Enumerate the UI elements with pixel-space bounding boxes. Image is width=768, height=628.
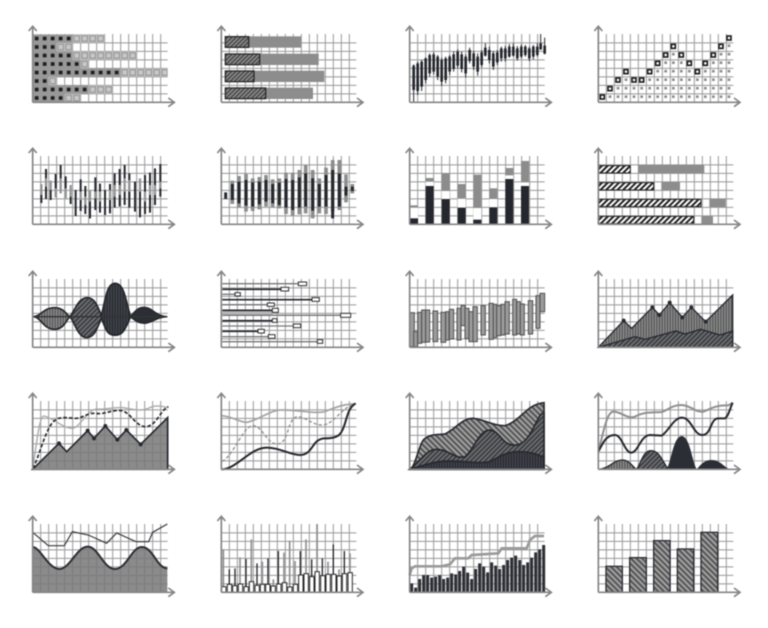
chart: area with dashed line	[29, 393, 174, 474]
chart: symmetric range bars	[217, 148, 363, 229]
chart: stacked wave areas	[406, 393, 551, 474]
chart: boxes with stems	[217, 516, 363, 597]
chart: stepped dot matrix	[594, 26, 740, 107]
chart: candlesticks rising	[406, 26, 551, 107]
chart: progress bars	[217, 26, 363, 107]
chart: heat grid of squares	[29, 26, 174, 107]
chart: wave area with thin line	[29, 516, 174, 597]
chart: two-tone range bars	[29, 148, 174, 229]
chart: floating box bars	[406, 271, 551, 352]
chart: hatched gantt bars	[594, 148, 740, 229]
chart: layered peak areas	[594, 271, 740, 352]
chart: hatched column bars	[594, 516, 740, 597]
chart: three curved lines	[217, 393, 363, 474]
chart: waveform lenses	[29, 271, 174, 352]
chart: stacked column bars	[406, 148, 551, 229]
chart: lines over humps	[594, 393, 740, 474]
chart: lollipop lines	[217, 271, 363, 352]
chart: columns with stepped band	[406, 516, 551, 597]
